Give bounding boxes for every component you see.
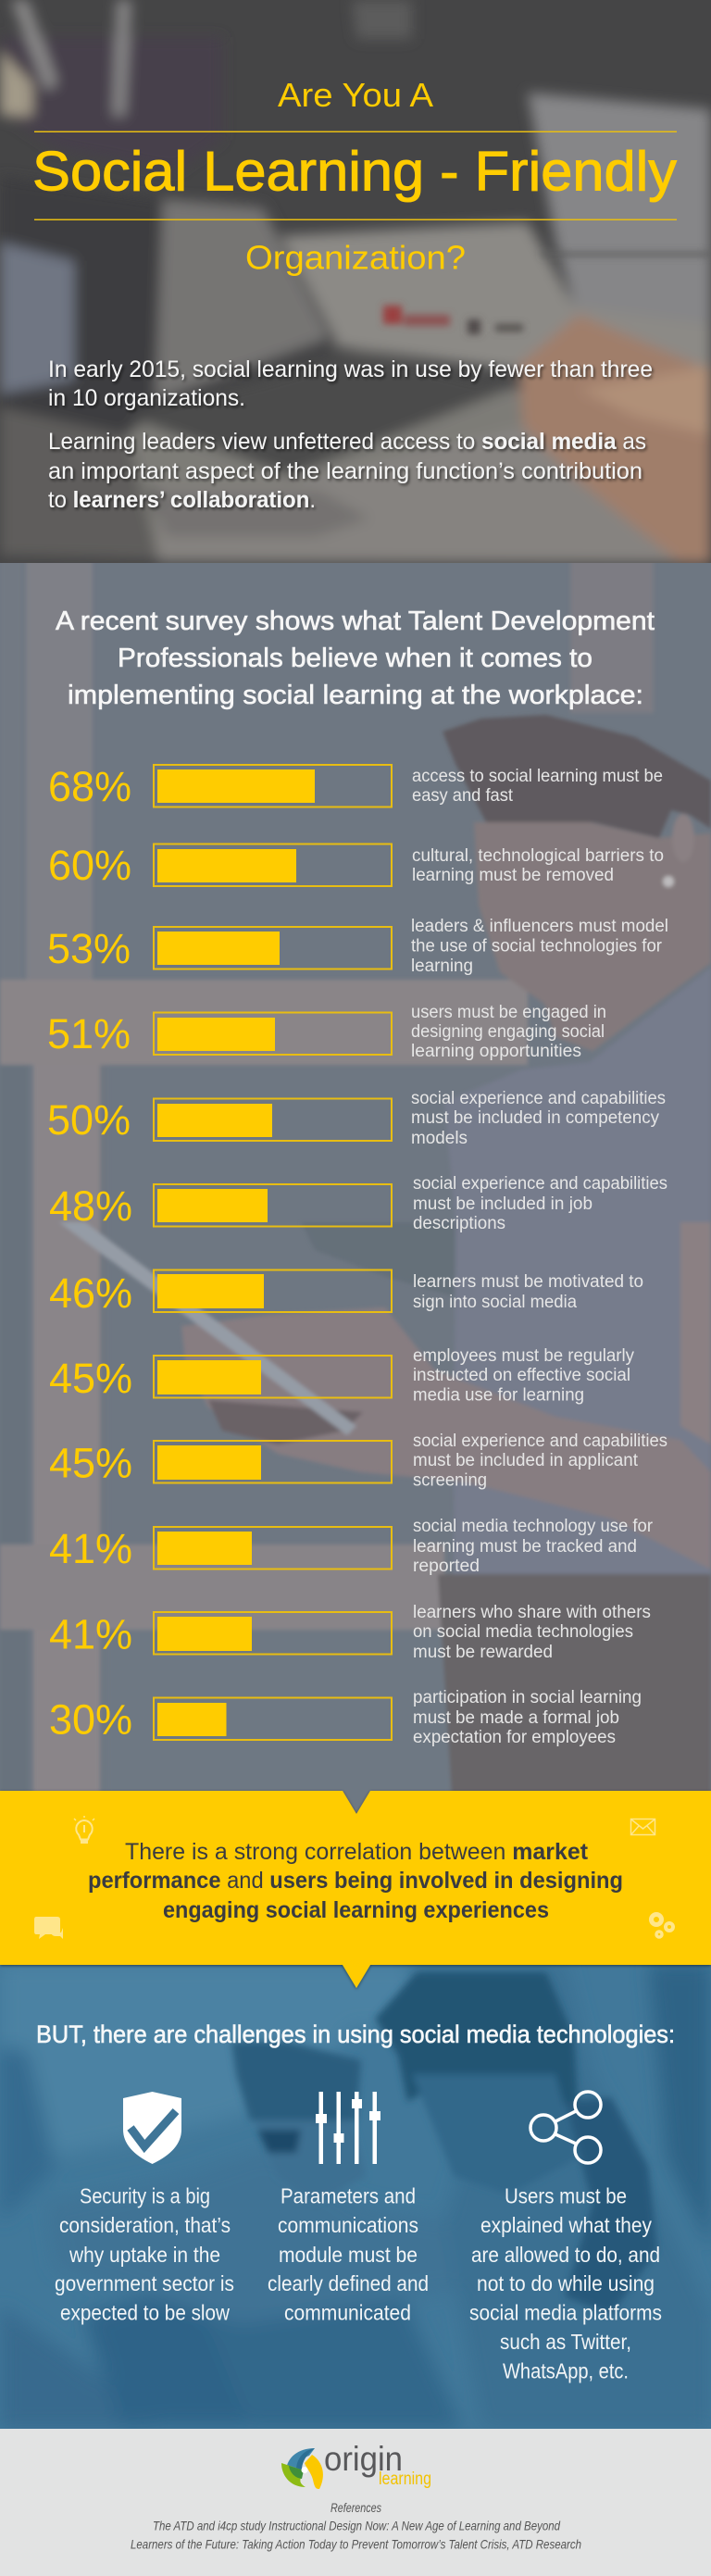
callout text xyxy=(88,1839,623,1923)
callout text: There is a strong correlation between market xyxy=(125,1839,589,1865)
bar row: 53%: leaders & influencers must model xyxy=(411,917,668,936)
background photo: two men at a laptop xyxy=(0,1963,711,2429)
references: The ATD and i4cp study Instructional Design Now: A New Age of Learning and Beyond xyxy=(153,2519,561,2533)
intro paragraph 2 xyxy=(48,429,646,513)
bar row: 41% rewarded xyxy=(49,1603,651,1662)
challenge text: security: why uptake in the xyxy=(69,2243,220,2267)
bar row: 60%: cultural, technological barriers to xyxy=(412,846,664,866)
icon: envelope xyxy=(631,1819,655,1835)
intro paragraph 1 xyxy=(48,356,653,411)
survey heading: A recent survey shows what Talent Development xyxy=(56,606,655,636)
bar row: 30% xyxy=(49,1688,642,1747)
bar row: 68%: easy and fast xyxy=(412,786,514,806)
bar row: 41% rewarded: 41% xyxy=(49,1611,132,1657)
logo: origin learning: origin xyxy=(324,2440,403,2478)
bar row: 50%: social experience and capabilities xyxy=(411,1089,666,1108)
intro paragraph 1: in 10 organizations. xyxy=(48,385,245,411)
bar row: 48%: must be included in job xyxy=(413,1194,592,1214)
survey heading: Professionals believe when it comes to xyxy=(118,644,592,673)
icon: gears xyxy=(652,1915,673,1937)
challenge text: security: expected to be slow xyxy=(60,2300,230,2324)
panel: survey results xyxy=(0,556,711,1833)
bar row: 46% xyxy=(49,1269,643,1317)
bar row: 48%: descriptions xyxy=(413,1214,505,1233)
bar row: 53%: 53% xyxy=(47,925,131,972)
bar row: 68%: 68% xyxy=(48,763,131,810)
challenge text: users: are allowed to do, and xyxy=(471,2243,660,2267)
bar row: 45% employees: media use for learning xyxy=(413,1385,584,1406)
challenge text: users xyxy=(469,2183,662,2383)
challenge text: parameters: clearly defined and xyxy=(268,2271,429,2295)
bar row: 41% tracked: 41% xyxy=(49,1525,132,1572)
references xyxy=(131,2500,581,2552)
challenge text: security: consideration, that’s xyxy=(59,2213,231,2237)
challenge text: security xyxy=(55,2183,234,2324)
logo: origin learning xyxy=(281,2440,431,2489)
bar row: 68% xyxy=(48,763,663,810)
bar row: 45% employees: instructed on effective social xyxy=(413,1366,630,1385)
challenge text: users: social media platforms xyxy=(469,2300,662,2324)
bar row: 51%: users must be engaged in xyxy=(411,1003,606,1022)
challenge text: parameters: Parameters and xyxy=(281,2183,416,2207)
icon: share network xyxy=(530,2092,601,2163)
bar row: 41% rewarded: learners who share with others xyxy=(413,1603,651,1622)
bar row: 41% tracked: social media technology use for xyxy=(413,1517,654,1536)
bar row: 45% screening: must be included in applicant xyxy=(413,1451,639,1470)
bar row: 30%: expectation for employees xyxy=(413,1728,616,1747)
callout yellow shape with notch and pointer xyxy=(0,1791,711,1988)
bar row: 48%: social experience and capabilities xyxy=(413,1174,667,1194)
bar row: 41% rewarded: on social media technologies xyxy=(413,1622,633,1642)
challenge text: users: explained what they xyxy=(480,2213,652,2237)
intro paragraph 2: an important aspect of the learning function’s contribution xyxy=(48,458,642,484)
challenge text: parameters: module must be xyxy=(279,2243,418,2267)
panel: footer xyxy=(0,2429,711,2576)
main title: Social Learning - Friendly xyxy=(32,141,677,202)
bar row: 30%: must be made a formal job xyxy=(413,1708,619,1728)
background photo: woman with tablet at window xyxy=(0,556,711,1833)
bar row: 48%: 48% xyxy=(49,1182,132,1230)
intro paragraph 1: In early 2015, social learning was in use by fewer than three xyxy=(48,356,653,382)
bar row: 41% rewarded: must be rewarded xyxy=(413,1643,553,1662)
bar row: 41% tracked: reported xyxy=(413,1557,480,1576)
bar row: 53%: the use of social technologies for xyxy=(411,937,663,956)
bar row: 53% xyxy=(47,917,668,976)
bar row: 50%: 50% xyxy=(47,1096,131,1144)
bar row: 48% xyxy=(49,1174,667,1233)
challenges heading: BUT, there are challenges in using social media technologies: xyxy=(36,2020,675,2048)
challenge text: users: such as Twitter, xyxy=(500,2330,631,2354)
bar row: 60% xyxy=(48,842,664,889)
background photo: blurred laptops on desk xyxy=(0,0,711,563)
panel: title header xyxy=(0,0,711,563)
rule below main title xyxy=(34,219,677,220)
bar row: 30%: 30% xyxy=(49,1696,132,1743)
callout text: performance and users being involved in designing xyxy=(88,1868,623,1894)
title line: Organization?: Organization? xyxy=(245,239,466,276)
footer background xyxy=(0,2429,711,2576)
icon: light bulb xyxy=(74,1816,94,1844)
references: Learners of the Future: Taking Action Today to Prevent Tomorrow’s Talent Crisis, ATD Research xyxy=(131,2537,581,2552)
challenge text: security: government sector is xyxy=(55,2271,234,2295)
icon: security shield xyxy=(123,2092,181,2164)
icon: chat bubbles xyxy=(34,1917,63,1939)
references: References xyxy=(331,2500,381,2515)
challenge text: users: Users must be xyxy=(505,2183,627,2207)
bar row: 51%: learning opportunities xyxy=(411,1042,581,1061)
bar row: 60%: learning must be removed xyxy=(412,866,614,885)
icon: sliders xyxy=(316,2092,380,2164)
challenge text: security: Security is a big xyxy=(80,2183,210,2207)
bar row: 45% employees: employees must be regularly xyxy=(413,1346,634,1366)
bar row: 46%: learners must be motivated to xyxy=(413,1272,643,1292)
intro paragraph 2: Learning leaders view unfettered access to social media as xyxy=(48,429,646,455)
challenge text: parameters: communications xyxy=(278,2213,418,2237)
bar row: 45% screening: social experience and capabilities xyxy=(413,1432,667,1451)
bar row: 45% screening: 45% xyxy=(49,1439,132,1487)
challenge text: parameters: communicated xyxy=(284,2300,411,2324)
bar row: 45% screening: screening xyxy=(413,1470,487,1491)
callout text: engaging social learning experiences xyxy=(163,1897,549,1923)
survey heading xyxy=(56,606,655,710)
bar row: 45% screening xyxy=(49,1432,667,1491)
bar row: 50%: must be included in competency xyxy=(411,1108,659,1128)
rule above main title xyxy=(34,131,677,132)
title line: Are You A: Are You A xyxy=(278,76,433,114)
bar row: 41% tracked: learning must be tracked and xyxy=(413,1537,637,1557)
bar row: 60%: 60% xyxy=(48,842,131,889)
bar row: 46%: 46% xyxy=(49,1269,132,1317)
bar row: 30%: participation in social learning xyxy=(413,1688,642,1707)
challenge text: users: not to do while using xyxy=(477,2271,655,2295)
bar row: 45% employees xyxy=(49,1346,634,1406)
challenge text: users: WhatsApp, etc. xyxy=(503,2359,629,2383)
bar row: 51%: 51% xyxy=(47,1010,131,1057)
survey heading: implementing social learning at the workplace: xyxy=(68,681,643,710)
logo: origin learning: learning xyxy=(379,2470,431,2489)
bar row: 50%: models xyxy=(411,1129,468,1148)
bar row: 53%: learning xyxy=(411,957,473,976)
bar row: 46%: sign into social media xyxy=(413,1293,577,1312)
bar row: 68%: access to social learning must be xyxy=(412,767,663,786)
bar row: 50% xyxy=(47,1089,666,1148)
panel: challenges xyxy=(0,1963,711,2429)
intro paragraph 2: to learners’ collaboration. xyxy=(48,487,316,513)
bar row: 51% xyxy=(47,1003,606,1061)
bar row: 51%: designing engaging social xyxy=(411,1022,605,1042)
callout: correlation banner xyxy=(0,1791,711,1988)
bar row: 41% tracked xyxy=(49,1517,654,1576)
challenge text: parameters xyxy=(268,2183,429,2324)
bar row: 45% employees: 45% xyxy=(49,1355,132,1402)
